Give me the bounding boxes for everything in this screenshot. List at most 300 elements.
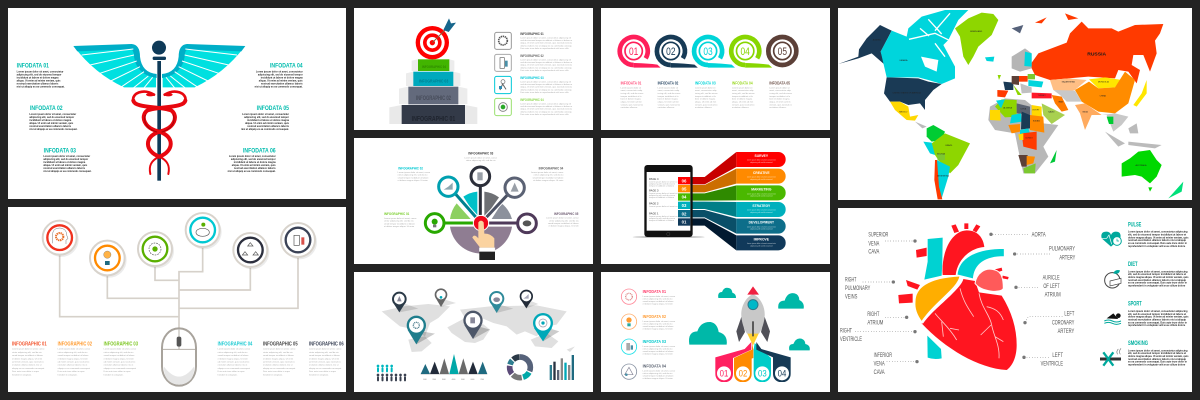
ribbons: perspective connectors bbox=[690, 152, 736, 250]
ribbon card: creative bbox=[736, 169, 786, 184]
icon: circle 01 bbox=[621, 289, 637, 304]
text: infodata 05: aliqua. Ut enim ad minim veniam, quis bbox=[245, 122, 290, 125]
map: grey world silhouette bbox=[382, 304, 575, 352]
text: item 03: aliqua. Ut enim ad minim veniam, quis nostrud exercita bbox=[520, 86, 573, 89]
icon: pulse heart bbox=[1101, 232, 1121, 247]
ribbon card: improve: adipiscing elit sed do eiusmod bbox=[750, 244, 772, 247]
text: infodata 03: tempor incididunt ut la bbox=[695, 95, 717, 98]
text: column 05: ad minim veniam, quis nostrud ex bbox=[263, 360, 296, 363]
text: infodata 03: Lorem ipsum dolor sit bbox=[695, 86, 716, 89]
text: infodata 04: aliqua. Ut enim ad minim veniam, quis bbox=[259, 80, 303, 83]
heading: infodata 03: INFODATA 03 bbox=[695, 81, 716, 86]
heading: infographic 05: INFOGRAPHIC 05 bbox=[263, 341, 298, 347]
map labels: CHINA bbox=[1100, 95, 1106, 98]
text: infodata 01: smod tempor incididunt ut labore bbox=[643, 300, 674, 303]
label: pulmonary artery: PULMONARY bbox=[1049, 247, 1075, 253]
text: infodata 01: amet, consectetur adip bbox=[621, 89, 643, 92]
text: column 01: ctetur adipiscing elit, sed do eiu bbox=[12, 351, 42, 354]
text: pulse: elit, sed do eiusmod tempor incididunt ut labore et bbox=[1128, 233, 1186, 236]
text: column 02: ercitation ullamco laboris nisi ut bbox=[58, 364, 88, 367]
icon: circle 4 bbox=[186, 213, 222, 249]
text: infodata 03: smod tempor incididunt ut labore bbox=[643, 350, 674, 353]
heading: smoking: SMOKING bbox=[1128, 340, 1148, 347]
text: infodata 02: ctetur adipiscing elit, sed do eiu bbox=[643, 322, 673, 325]
panel: colored world map bbox=[838, 8, 1192, 200]
map labels: CONGO bbox=[1025, 137, 1033, 139]
text: sport: nostrud exercitation ullamco laboris nisi ut aliquip bbox=[1128, 318, 1187, 321]
text: infodata 02: et dolore magna aliqua. Ut enim bbox=[643, 327, 673, 330]
text: infodata 02: amet, consectetur adip bbox=[658, 89, 680, 92]
ribbon card: creative: Lorem ipsum dolor sit amet consectetur bbox=[747, 176, 776, 179]
icon: circle 03 bbox=[621, 339, 637, 354]
text: column 06: aliquip ex ea commodo consequat bbox=[309, 367, 342, 370]
text: infodata 03: aliqua. Ut enim ad min bbox=[695, 100, 717, 103]
map: europe and asia bbox=[997, 13, 1163, 148]
text: infodata 02: nisi ut aliquip ex ea commodo consequat. bbox=[29, 128, 78, 131]
map labels bbox=[873, 30, 1147, 178]
heading: infographic 01: INFOGRAPHIC 01 bbox=[12, 341, 47, 347]
map labels: ALASKA bbox=[873, 39, 881, 42]
chart: staircase: INFOGRAPHIC 03 bbox=[419, 79, 448, 85]
text: infodata 04: Lorem ipsum dolor sit amet, conse bbox=[643, 370, 676, 373]
text: column 04: et dolore magna aliqua. Ut enim bbox=[218, 357, 248, 360]
number tabs: 06 bbox=[682, 178, 687, 183]
text: infodata 04: adipiscing elit, sed do eiusmod tempor bbox=[258, 74, 303, 77]
text: infodata 01: adipiscing elit, sed do eiusmod tempor bbox=[17, 74, 62, 77]
chart: donut bbox=[510, 357, 530, 378]
text: column 01: Lorem ipsum dolor sit amet, conse bbox=[12, 348, 45, 351]
icon: heart anatomy bbox=[898, 223, 1017, 370]
icon: tablet bbox=[644, 165, 693, 237]
icon: tablet: tempor incididunt ut labore bbox=[649, 196, 675, 199]
step 02: 02 bbox=[666, 46, 675, 58]
map labels: MONGOLIA bbox=[1098, 81, 1109, 84]
text: column 05: et dolore magna aliqua. Ut enim bbox=[263, 357, 293, 360]
ribbon card: improve: Lorem ipsum dolor sit amet consectetur bbox=[747, 242, 776, 245]
icon: right wing bbox=[162, 44, 245, 89]
text: infodata 05: veniam, quis nostrud ex bbox=[769, 103, 793, 106]
text: infodata 02: Lorem ipsum dolor sit bbox=[658, 86, 678, 89]
text: column 06: smod tempor incididunt ut labore bbox=[309, 354, 341, 357]
heading: diet: DIET bbox=[1128, 261, 1138, 268]
text: item 02: et dolore magna aliqua. Ut enim bbox=[398, 179, 428, 182]
label: right pulmonary veins: PULMONARY bbox=[845, 286, 870, 292]
text: infodata 05: nostrud exercitation ullamco laboris bbox=[247, 125, 290, 128]
text: infodata 02: nostrud exercitation ullamco laboris bbox=[29, 125, 72, 128]
heading: infographic 02: INFOGRAPHIC 02 bbox=[398, 165, 424, 170]
step 04: 04 bbox=[740, 46, 750, 58]
text: column 04: Lorem ipsum dolor sit amet, conse bbox=[218, 348, 251, 351]
text: infodata 03: incididunt ut labore et dolore magna bbox=[43, 161, 86, 164]
chart: triangle peaks: 4000 bbox=[452, 379, 455, 381]
text: item 02: Lorem ipsum dolor sit amet, conse bbox=[398, 171, 431, 174]
text: infodata 03: adipiscing elit, sed do eiusmod tempor bbox=[43, 158, 88, 161]
text: infodata 02: ercitation ullamco. bbox=[658, 106, 675, 109]
text: column 02: ctetur adipiscing elit, sed do eiu bbox=[58, 351, 88, 354]
heading: infographic 03: INFOGRAPHIC 03 bbox=[104, 341, 138, 347]
label: left coronary artery: CORONARY bbox=[1052, 320, 1074, 326]
text: sport: Lorem ipsum dolor sit amet, consectetur adipiscing bbox=[1128, 310, 1188, 313]
chart: four funnel tabs bbox=[715, 342, 791, 383]
text: infodata 04: smod tempor incididunt ut labore bbox=[643, 375, 674, 378]
text: smoking: Lorem ipsum dolor sit amet, consectetur adipiscing bbox=[1128, 349, 1188, 352]
text: infodata 01: et dolore magna aliqua. Ut enim bbox=[643, 302, 673, 305]
text: item 01: et dolore magna aliqua. Ut enim bbox=[384, 225, 414, 228]
chart: triangle peaks bbox=[421, 354, 487, 381]
text: column 03: et dolore magna aliqua. Ut enim bbox=[104, 357, 134, 360]
text: column 05: ercitation ullamco laboris nisi ut bbox=[263, 364, 293, 367]
text: item 03: Lorem ipsum dolor sit amet, conse bbox=[464, 157, 498, 160]
heading: infographic 03: INFOGRAPHIC 03 bbox=[468, 151, 494, 156]
icon: pin 1 bbox=[392, 292, 418, 312]
heading: sport: SPORT bbox=[1128, 301, 1142, 308]
heading: infodata 03: INFODATA 03 bbox=[643, 339, 666, 344]
text: infodata 02: Lorem ipsum dolor sit amet, conse bbox=[643, 320, 676, 323]
text: column 04: ctetur adipiscing elit, sed do eiu bbox=[218, 351, 248, 354]
text: column 06: Duis aute irure dolor in repre bbox=[309, 370, 337, 373]
heading: infodata 04: INFODATA 04 bbox=[732, 81, 753, 86]
chart: staircase bbox=[389, 59, 477, 124]
icon: tablet: PAGE 2 bbox=[649, 201, 659, 205]
text: column 06: ctetur adipiscing elit, sed do eiu bbox=[309, 351, 339, 354]
map: africa bbox=[988, 98, 1058, 173]
icon: circle 04 bbox=[621, 364, 637, 379]
text: infodata 01: bore et dolore magna bbox=[621, 98, 642, 101]
text: item 05: smod tempor incididunt ut labore bbox=[548, 222, 579, 225]
heading: infographic 04: INFOGRAPHIC 04 bbox=[539, 165, 564, 170]
text: column 06: et dolore magna aliqua. Ut enim bbox=[309, 357, 339, 360]
icon: tablet: adipiscing elit sed do eiusm bbox=[649, 183, 675, 186]
text: infodata 04: tempor incididunt ut la bbox=[732, 95, 754, 98]
chart: pie segments bbox=[450, 192, 512, 253]
text: infodata 05: iscing elit, sed do eiusm bbox=[769, 92, 792, 95]
text: column 02: smod tempor incididunt ut labore bbox=[58, 354, 89, 357]
step 03: 03 bbox=[703, 46, 713, 58]
chart: staircase: INFOGRAPHIC 01 bbox=[412, 114, 456, 123]
text: pulse: dolore magna aliqua. Ut enim ad minim veniam, quis bbox=[1128, 236, 1189, 239]
ribbon card: marketing bbox=[736, 185, 786, 200]
text: item 03: Duis aute irure dolor in reprehenderit velit esse cillu bbox=[520, 91, 569, 94]
icon: circle 6 bbox=[281, 223, 317, 259]
text: item 04: smod tempor incididunt ut labore bbox=[532, 176, 564, 179]
icon: circle 02 bbox=[439, 177, 458, 196]
map: oceania bbox=[1122, 150, 1183, 198]
text: infodata 01: aliqua. Ut enim ad min bbox=[621, 100, 643, 103]
text: column 01: et dolore magna aliqua. Ut enim bbox=[12, 357, 42, 360]
text: column 01: aliquip ex ea commodo consequat bbox=[12, 367, 45, 370]
text: infodata 02: adipiscing elit, sed do eiusmod tempor bbox=[29, 116, 74, 119]
step 05: 05 bbox=[778, 46, 787, 58]
step 03 bbox=[694, 37, 735, 68]
text: column 01: Duis aute irure dolor in repre bbox=[12, 370, 40, 373]
heading: infodata 02: INFODATA 02 bbox=[30, 105, 63, 112]
heading: infodata 02: INFODATA 02 bbox=[658, 81, 679, 86]
text: column 02: Duis aute irure dolor in repre bbox=[58, 370, 85, 373]
text: infodata 03: aliqua. Ut enim ad minim veniam, quis bbox=[43, 164, 88, 167]
text: smoking: ex ea commodo consequat. Duis aute irure dolor in bbox=[1128, 361, 1187, 364]
step 02 bbox=[657, 37, 698, 68]
icon: box 2 bbox=[495, 54, 511, 71]
text: infodata 04: nostrud exercitation ullamco laboris bbox=[261, 83, 303, 86]
text: infodata 06: incididunt ut labore et dolore magna bbox=[234, 161, 276, 164]
text: column 02: aliquip ex ea commodo consequat bbox=[58, 367, 90, 370]
text: column 05: ctetur adipiscing elit, sed do eiu bbox=[263, 351, 293, 354]
icon: no smoking bbox=[1100, 348, 1121, 366]
icon: red button bbox=[473, 215, 489, 231]
text: item 02: sed do eiusmod tempor incididunt ut labore et dolore m bbox=[520, 61, 572, 64]
text: column 03: henderit in voluptate. bbox=[104, 373, 124, 376]
map labels: SAUDI bbox=[1048, 111, 1055, 114]
text: infodata 06: nisi ut aliquip ex ea commodo consequat. bbox=[228, 170, 276, 173]
heading: infographic 06: INFOGRAPHIC 06 bbox=[309, 341, 344, 347]
map labels: RUSSIA bbox=[1087, 51, 1106, 57]
text: infodata 04: et dolore magna aliqua. Ut enim bbox=[643, 377, 673, 380]
map labels: LIBYA bbox=[1021, 107, 1027, 110]
panel: target steps infographic bbox=[354, 8, 593, 130]
text: column 03: aliquip ex ea commodo consequat bbox=[104, 367, 136, 370]
icon: tablet: PAGE 4 bbox=[649, 177, 659, 181]
heading: pulse: PULSE bbox=[1128, 222, 1141, 229]
text: infodata 06: aliqua. Ut enim ad minim veniam, quis bbox=[232, 164, 276, 167]
label: auricle of left atrium: ATRIUM bbox=[1045, 293, 1061, 299]
text: infodata 05: Lorem ipsum dolor sit bbox=[769, 86, 790, 89]
panel: hand and radial pie infographic bbox=[354, 138, 593, 264]
text: item 02: ctetur adipiscing elit, sed do eiu bbox=[398, 174, 428, 177]
text: pulse: Lorem ipsum dolor sit amet, consectetur adipiscing bbox=[1128, 231, 1188, 234]
label: right pulmonary veins: RIGHT bbox=[845, 278, 857, 284]
chart: triangle peaks: 1000 bbox=[423, 379, 427, 381]
text: infodata 02: aliqua. Ut enim ad min bbox=[658, 100, 680, 103]
text: pulse: ex ea commodo consequat. Duis aute irure dolor in bbox=[1128, 242, 1187, 245]
text: item 01: Lorem ipsum dolor sit amet, consectetur adipiscing eli bbox=[520, 36, 571, 39]
number tabs: 05 bbox=[682, 186, 687, 191]
text: infodata 02: iscing elit, sed do eiusm bbox=[658, 92, 680, 95]
step 01: 01 bbox=[629, 46, 638, 58]
icon: circle 01 bbox=[425, 214, 444, 232]
panel: mouse connector infographic bbox=[8, 207, 346, 392]
text: sport: ex ea commodo consequat. Duis aute irure dolor in bbox=[1128, 321, 1187, 324]
ribbon card: development: DEVELOPMENT bbox=[749, 221, 774, 225]
label: superior vena cava: VENA bbox=[868, 241, 879, 247]
heading: infographic 02: INFOGRAPHIC 02 bbox=[58, 341, 92, 347]
text: infodata 03: et dolore magna aliqua. Ut enim bbox=[643, 352, 673, 355]
label: auricle of left atrium: AURICLE bbox=[1043, 276, 1060, 282]
text: infodata 03: veniam, quis nostrud ex bbox=[695, 103, 718, 106]
ribbon card: marketing: MARKETING bbox=[751, 188, 772, 192]
number tabs bbox=[678, 177, 690, 226]
step 01 bbox=[620, 37, 661, 68]
text: column 05: Lorem ipsum dolor sit amet, conse bbox=[263, 348, 296, 351]
map labels: UNITED STATES OF AMERICA bbox=[893, 91, 921, 94]
text: item 04: ullamco laboris nisi ut aliquip ex ea commodo consequ bbox=[520, 110, 573, 113]
icon: apple bbox=[1105, 270, 1121, 288]
text: column 02: henderit in voluptate. bbox=[58, 373, 78, 376]
icon: tablet: Lorem ipsum dolor sit amet co bbox=[649, 215, 678, 218]
text: infodata 03: Lorem ipsum dolor sit amet, consectetur bbox=[43, 155, 90, 158]
ribbon card: improve bbox=[736, 235, 786, 250]
text: item 05: Lorem ipsum dolor sit amet, conse bbox=[546, 217, 579, 220]
heading: infographic 01: INFOGRAPHIC 01 bbox=[520, 31, 544, 36]
text: column 06: ercitation ullamco laboris nisi ut bbox=[309, 364, 339, 367]
icon: circle 2 bbox=[90, 241, 127, 278]
text: item 04: aliqua. Ut enim ad minim veniam, quis nostrud exercita bbox=[520, 108, 573, 111]
text: infodata 05: bore et dolore magna bbox=[769, 98, 790, 101]
text: item 02: aliqua. Ut enim ad minim veniam, quis nostrud exercita bbox=[520, 64, 573, 67]
panel: map pins and charts infographic bbox=[354, 272, 593, 392]
text: infodata 06: nostrud exercitation ullamco laboris bbox=[234, 167, 276, 170]
text: column 01: smod tempor incididunt ut labore bbox=[12, 354, 44, 357]
label: left ventricle: LEFT bbox=[1052, 353, 1063, 359]
text: infodata 05: tempor incididunt ut la bbox=[769, 95, 791, 98]
heading: infodata 04: INFODATA 04 bbox=[270, 63, 303, 70]
panel: caduceus infographic bbox=[8, 8, 346, 199]
icon: rocket bbox=[736, 286, 770, 345]
label: right atrium: RIGHT bbox=[867, 312, 880, 318]
text: infodata 02: veniam, quis nostrud ex bbox=[658, 103, 681, 106]
heading: infodata 05: INFODATA 05 bbox=[769, 81, 790, 86]
text: smoking: dolore magna aliqua. Ut enim ad minim veniam, quis bbox=[1128, 355, 1189, 358]
text: item 03: sed do eiusmod tempor incididunt ut labore et dolore m bbox=[520, 83, 572, 86]
chart: four funnel tabs: 04 bbox=[778, 368, 786, 378]
text: item 02: Duis aute irure dolor in reprehenderit velit esse cillu bbox=[520, 69, 569, 72]
label: superior vena cava: SUPERIOR bbox=[868, 233, 889, 239]
text: infodata 04: veniam, quis nostrud ex bbox=[732, 103, 755, 106]
map labels: MEXICO bbox=[899, 111, 908, 113]
text: column 04: henderit in voluptate. bbox=[218, 373, 238, 376]
icon: clouds bbox=[689, 288, 810, 350]
text: infodata 02: aliqua. Ut enim ad minim veniam, quis bbox=[29, 122, 74, 125]
text: infodata 01: ctetur adipiscing elit, sed do eiu bbox=[643, 297, 673, 300]
text: infodata 05: Lorem ipsum dolor sit amet, consectetur bbox=[242, 113, 289, 116]
text: diet: dolore magna aliqua. Ut enim ad minim veniam, quis bbox=[1128, 276, 1189, 279]
map labels: BRAZIL bbox=[946, 144, 953, 147]
map labels: GREENLAND bbox=[970, 30, 983, 33]
text: column 04: aliquip ex ea commodo consequat bbox=[218, 367, 250, 370]
text: infodata 01: incididunt ut labore et dolore magna bbox=[17, 77, 59, 80]
label: right ventricle: VENTRICLE bbox=[840, 337, 862, 343]
text: column 02: Lorem ipsum dolor sit amet, conse bbox=[58, 348, 91, 351]
label: inferior vena cava: INFERIOR bbox=[874, 353, 892, 359]
icon: tablet: Lorem ipsum dolor sit amet co bbox=[649, 181, 678, 184]
map labels: ALGERIA bbox=[1003, 107, 1013, 110]
text: infodata 01: aliqua. Ut enim ad minim veniam, quis bbox=[17, 80, 61, 83]
chart: four funnel tabs: 03 bbox=[758, 368, 767, 378]
text: infodata 04: bore et dolore magna bbox=[732, 98, 753, 101]
text: column 03: smod tempor incididunt ut labore bbox=[104, 354, 135, 357]
text: infodata 01: ercitation ullamco. bbox=[621, 106, 638, 109]
text: item 04: Lorem ipsum dolor sit amet, conse bbox=[531, 171, 564, 174]
text: column 04: ercitation ullamco laboris nisi ut bbox=[218, 364, 248, 367]
label: aorta: AORTA bbox=[1032, 233, 1046, 239]
text: diet: reprehenderit in voluptate velit esse cillum dolore bbox=[1128, 284, 1186, 287]
icon: tablet: Lorem ipsum dolor sit amet co bbox=[649, 192, 678, 195]
text: column 04: smod tempor incididunt ut labore bbox=[218, 354, 249, 357]
text: infodata 04: amet, consectetur adip bbox=[732, 89, 754, 92]
text: infodata 03: amet, consectetur adip bbox=[695, 89, 717, 92]
text: infodata 04: iscing elit, sed do eiusm bbox=[732, 92, 755, 95]
step 05 bbox=[768, 37, 796, 65]
text: column 01: henderit in voluptate. bbox=[12, 373, 32, 376]
icon: pin 6 bbox=[463, 311, 490, 339]
map labels: IRAN bbox=[1058, 100, 1064, 103]
text: sport: elit, sed do eiusmod tempor incididunt ut labore et bbox=[1128, 313, 1186, 316]
text: item 03: ullamco laboris nisi ut aliquip ex ea commodo consequ bbox=[520, 88, 573, 91]
text: infodata 04: aliqua. Ut enim ad min bbox=[732, 100, 754, 103]
text: infodata 03: nostrud exercitation ullamco laboris bbox=[43, 167, 86, 170]
text: infodata 05: aliqua. Ut enim ad min bbox=[769, 100, 791, 103]
icon: circle 02 bbox=[621, 314, 637, 329]
label: left coronary artery: LEFT bbox=[1064, 312, 1075, 318]
map labels: CANADA bbox=[899, 59, 908, 62]
text: smoking: elit, sed do eiusmod tempor incididunt ut labore et bbox=[1128, 352, 1186, 355]
text: infodata 01: iscing elit, sed do eiusm bbox=[621, 92, 643, 95]
icon: circle 3 bbox=[138, 232, 174, 268]
text: infodata 01: nostrud exercitation ullamco laboris bbox=[17, 83, 59, 86]
label: right atrium: ATRIUM bbox=[867, 321, 883, 327]
icon: tablet: PAGE 3 bbox=[649, 188, 659, 192]
text: item 01: ullamco laboris nisi ut aliquip ex ea commodo consequ bbox=[520, 44, 573, 47]
number tabs: 01 bbox=[682, 220, 687, 225]
map labels: AUSTRALIA bbox=[1135, 164, 1147, 167]
text: infodata 04: ercitation ullamco. bbox=[732, 106, 750, 109]
icon: staff bbox=[152, 41, 166, 181]
map labels: SUDAN bbox=[1033, 120, 1040, 123]
heading: infographic 01: INFOGRAPHIC 01 bbox=[384, 211, 410, 216]
text: infodata 01: tempor incididunt ut la bbox=[621, 95, 642, 98]
panel: rocket infographic bbox=[601, 272, 830, 392]
shadow under tablet bbox=[633, 236, 705, 238]
ribbon card: strategy: Lorem ipsum dolor sit amet consectetur bbox=[747, 209, 776, 212]
text: item 04: ctetur adipiscing elit, sed do eiu bbox=[534, 174, 564, 177]
text: column 04: ad minim veniam, quis nostrud ex bbox=[218, 360, 250, 363]
text: infodata 03: bore et dolore magna bbox=[695, 98, 716, 101]
text: column 02: ad minim veniam, quis nostrud ex bbox=[58, 360, 90, 363]
text: sport: dolore magna aliqua. Ut enim ad minim veniam, quis bbox=[1128, 316, 1189, 319]
label: left coronary artery: ARTERY bbox=[1058, 329, 1074, 335]
map labels: BOLIVIA bbox=[937, 153, 946, 156]
chart: triangle peaks: 2000 bbox=[432, 379, 436, 381]
label: pulmonary artery: ARTERY bbox=[1059, 255, 1075, 261]
panel: tablet ribbons infographic bbox=[601, 138, 830, 264]
text: diet: elit, sed do eiusmod tempor incididunt ut labore et bbox=[1128, 273, 1186, 276]
text: pulse: nostrud exercitation ullamco laboris nisi ut aliquip bbox=[1128, 239, 1187, 242]
ribbon card: development: Lorem ipsum dolor sit amet consectetur bbox=[747, 225, 776, 228]
icon: box 4 bbox=[495, 98, 511, 116]
text: column 03: Lorem ipsum dolor sit amet, conse bbox=[104, 348, 137, 351]
text: sport: reprehenderit in voluptate velit esse cillum dolore bbox=[1128, 324, 1186, 327]
ribbon card: survey: Lorem ipsum dolor sit amet consectetur bbox=[747, 159, 776, 162]
text: column 01: ercitation ullamco laboris nisi ut bbox=[12, 364, 42, 367]
icon: circle 03 bbox=[471, 167, 490, 186]
chart: staircase: INFOGRAPHIC 04 bbox=[422, 65, 447, 69]
text: item 03: Lorem ipsum dolor sit amet, consectetur adipiscing eli bbox=[520, 80, 571, 83]
heading: infodata 01: INFODATA 01 bbox=[643, 289, 666, 294]
text: infodata 02: bore et dolore magna bbox=[658, 98, 679, 101]
text: column 05: Duis aute irure dolor in repre bbox=[263, 370, 291, 373]
text: column 06: Lorem ipsum dolor sit amet, conse bbox=[309, 348, 342, 351]
ribbon card: creative: adipiscing elit sed do eiusmod bbox=[750, 178, 772, 181]
ribbon card: improve: IMPROVE bbox=[754, 237, 770, 241]
text: item 04: et dolore magna aliqua. Ut enim bbox=[533, 179, 564, 182]
text: column 03: ercitation ullamco laboris nisi ut bbox=[104, 364, 134, 367]
heading: infodata 01: INFODATA 01 bbox=[17, 63, 49, 70]
icon: box 1 bbox=[495, 32, 511, 49]
text: infodata 01: Lorem ipsum dolor sit bbox=[621, 86, 641, 89]
icon: circle 5 bbox=[233, 233, 269, 269]
icon: mouse bbox=[162, 328, 196, 386]
heading: infodata 02: INFODATA 02 bbox=[643, 314, 666, 319]
text: item 01: aliqua. Ut enim ad minim veniam, quis nostrud exercita bbox=[520, 42, 573, 45]
